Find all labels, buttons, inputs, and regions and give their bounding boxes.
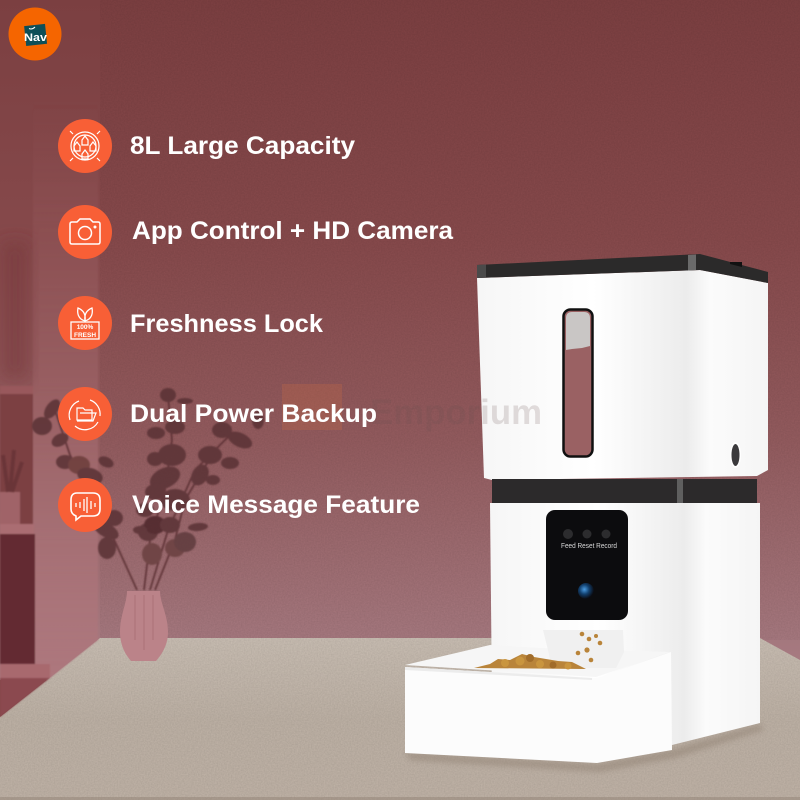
icon: 100% fresh bbox=[58, 296, 112, 350]
floor carpet bbox=[0, 638, 800, 800]
bowl top rim bbox=[405, 645, 670, 677]
feature: app control and camera bbox=[58, 205, 454, 259]
feeder lid bbox=[477, 254, 768, 283]
icon: food capacity bbox=[58, 119, 112, 173]
control panel: Feed Reset Record bbox=[561, 541, 617, 550]
plant: stems and leaves bbox=[32, 388, 264, 590]
label: Dual Power Backup bbox=[130, 400, 377, 428]
bowl front bbox=[405, 652, 672, 763]
pink vase bbox=[120, 591, 168, 661]
icon: 100% fresh: FRESH bbox=[74, 332, 96, 339]
label: 8L Large Capacity bbox=[130, 132, 355, 160]
label: Voice Message Feature bbox=[132, 491, 420, 519]
feature: dual power backup bbox=[58, 387, 377, 441]
feeder upper container bbox=[477, 270, 768, 480]
label: App Control + HD Camera bbox=[132, 217, 454, 245]
watermark: faint brand mark bbox=[282, 384, 542, 432]
shelving unit bbox=[0, 100, 98, 717]
kibble pile bbox=[474, 632, 602, 670]
shadow under feeder bbox=[405, 724, 764, 772]
control panel bbox=[546, 510, 628, 620]
side button bbox=[730, 442, 741, 468]
food chute bbox=[543, 630, 624, 668]
watermark: faint brand mark: Emporium bbox=[370, 393, 542, 432]
feeder lower body bbox=[490, 503, 760, 745]
label: Freshness Lock bbox=[130, 310, 323, 338]
middle black band bbox=[492, 479, 757, 503]
logo badge bbox=[8, 8, 62, 60]
feature: freshness lock bbox=[58, 296, 323, 350]
icon: 100% fresh: 100% bbox=[77, 324, 94, 331]
food level window bbox=[564, 310, 592, 456]
feature: 8L large capacity bbox=[58, 119, 355, 173]
icon: voice chat bubble bbox=[58, 478, 112, 532]
logo badge: Nav bbox=[24, 32, 48, 44]
wall texture bbox=[100, 0, 800, 640]
icon: folder with cycle arrows bbox=[58, 387, 112, 441]
pet feeder product bbox=[405, 254, 768, 763]
icon: camera bbox=[58, 205, 112, 259]
feature: voice message bbox=[58, 478, 420, 532]
